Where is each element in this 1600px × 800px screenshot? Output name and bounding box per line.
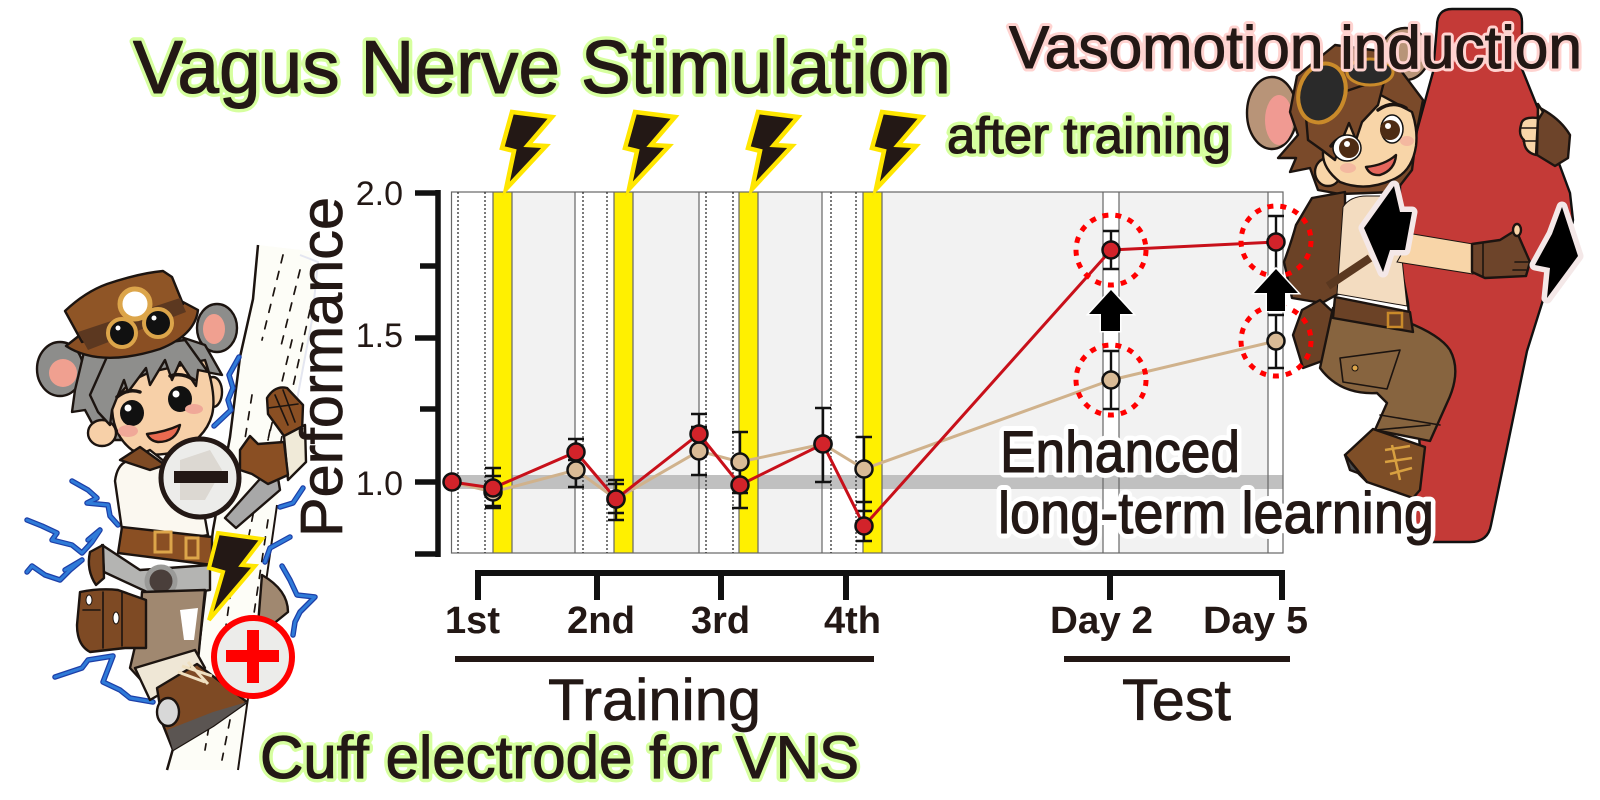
magnifier: plus pole — [214, 618, 292, 696]
pants — [130, 590, 205, 690]
x axis: Day 2 — [1050, 600, 1153, 642]
nerve trunk — [167, 245, 318, 770]
shoulder strap — [1328, 258, 1370, 286]
shirt — [115, 450, 208, 545]
gray belt — [102, 545, 210, 598]
y axis — [356, 175, 438, 557]
boot — [157, 662, 247, 750]
boot cuff — [135, 650, 205, 700]
callout: enhanced long-term learning — [998, 420, 1434, 546]
magnifier: minus pole — [161, 439, 239, 517]
near ear lobe — [1315, 158, 1341, 186]
mouth — [1366, 155, 1396, 175]
pouch — [77, 589, 146, 652]
title: Vagus Nerve Stimulation: Vagus Nerve Stimulation — [133, 25, 951, 109]
character: left climber on nerve with cuff electrode — [27, 245, 318, 770]
y axis title: Performance — [289, 197, 355, 537]
mouth — [147, 425, 180, 442]
face — [1323, 93, 1416, 187]
callout: enhanced long-term learning: Enhanced — [1000, 420, 1240, 485]
heading: Vasomotion induction: Vasomotion induction — [1009, 14, 1582, 81]
hat — [65, 271, 198, 358]
arm — [1397, 234, 1473, 274]
pouch — [1293, 300, 1333, 368]
x axis: 1st — [445, 600, 500, 642]
arrow: day 2 increase — [1089, 290, 1133, 331]
label: after training: after training — [947, 107, 1231, 164]
boot — [1345, 429, 1425, 498]
eyes — [120, 386, 192, 426]
dashed highlight circles — [1076, 206, 1311, 415]
torso — [1337, 196, 1407, 306]
near ear — [197, 304, 237, 352]
backpack — [1284, 192, 1345, 303]
outlined double arrow: vessel constriction right — [1535, 207, 1578, 298]
x axis: Day 5 — [1203, 600, 1308, 642]
fringe — [1305, 78, 1385, 160]
fringe — [90, 340, 208, 425]
side pouch — [89, 545, 104, 585]
training group: Training — [548, 668, 761, 733]
far ear — [1247, 77, 1297, 149]
back hair — [72, 335, 222, 440]
arrow: day 5 increase — [1254, 269, 1298, 311]
chart background — [451, 192, 1283, 553]
brows — [117, 375, 194, 397]
blush — [1340, 163, 1356, 173]
training group — [455, 656, 874, 733]
lightning bolts: stimulation after training — [502, 112, 922, 189]
icon: lightning on nerve — [209, 533, 262, 620]
pants — [1320, 308, 1455, 441]
blood vessel — [1400, 9, 1573, 542]
outlined double arrow: vessel constriction left — [1364, 186, 1412, 272]
x axis: 3rd — [691, 600, 750, 642]
white gap in pants — [180, 608, 198, 640]
x axis: 4th — [824, 600, 881, 642]
test group: Test — [1122, 668, 1231, 733]
far knee — [258, 575, 288, 625]
plot frame and session lines — [452, 192, 1283, 553]
harness collar — [120, 447, 165, 470]
face — [112, 360, 213, 455]
x axis — [445, 570, 1308, 642]
back ear — [1381, 28, 1429, 80]
blush — [118, 425, 138, 437]
upper hand — [1520, 104, 1570, 166]
character: right climber hugging blood vessel — [1247, 9, 1578, 542]
VNS series — [444, 234, 1284, 534]
eyes — [1333, 115, 1403, 161]
lower glove and gray cuff — [225, 436, 288, 528]
goggles — [1291, 57, 1393, 129]
error bars — [485, 216, 1284, 541]
line chart: performance by session — [289, 175, 1308, 733]
x axis: 2nd — [567, 600, 635, 642]
brows — [1331, 104, 1406, 146]
stimulation bars — [493, 192, 882, 553]
back hair — [1278, 45, 1423, 194]
control series — [452, 332, 1284, 508]
test group — [1064, 656, 1290, 733]
y axis: 1.0 — [356, 465, 403, 503]
upper glove — [267, 387, 306, 480]
sparks — [27, 357, 315, 702]
brown belt — [118, 527, 212, 565]
belt — [1333, 297, 1413, 332]
callout: enhanced long-term learning: long-term learning — [998, 481, 1434, 546]
label: Cuff electrode for VNS: Cuff electrode for VNS — [260, 724, 859, 791]
far ear — [37, 342, 83, 396]
y axis: 1.5 — [356, 317, 403, 355]
glove — [1472, 224, 1530, 278]
y axis: 2.0 — [356, 175, 403, 213]
near ear lobe — [88, 420, 116, 446]
